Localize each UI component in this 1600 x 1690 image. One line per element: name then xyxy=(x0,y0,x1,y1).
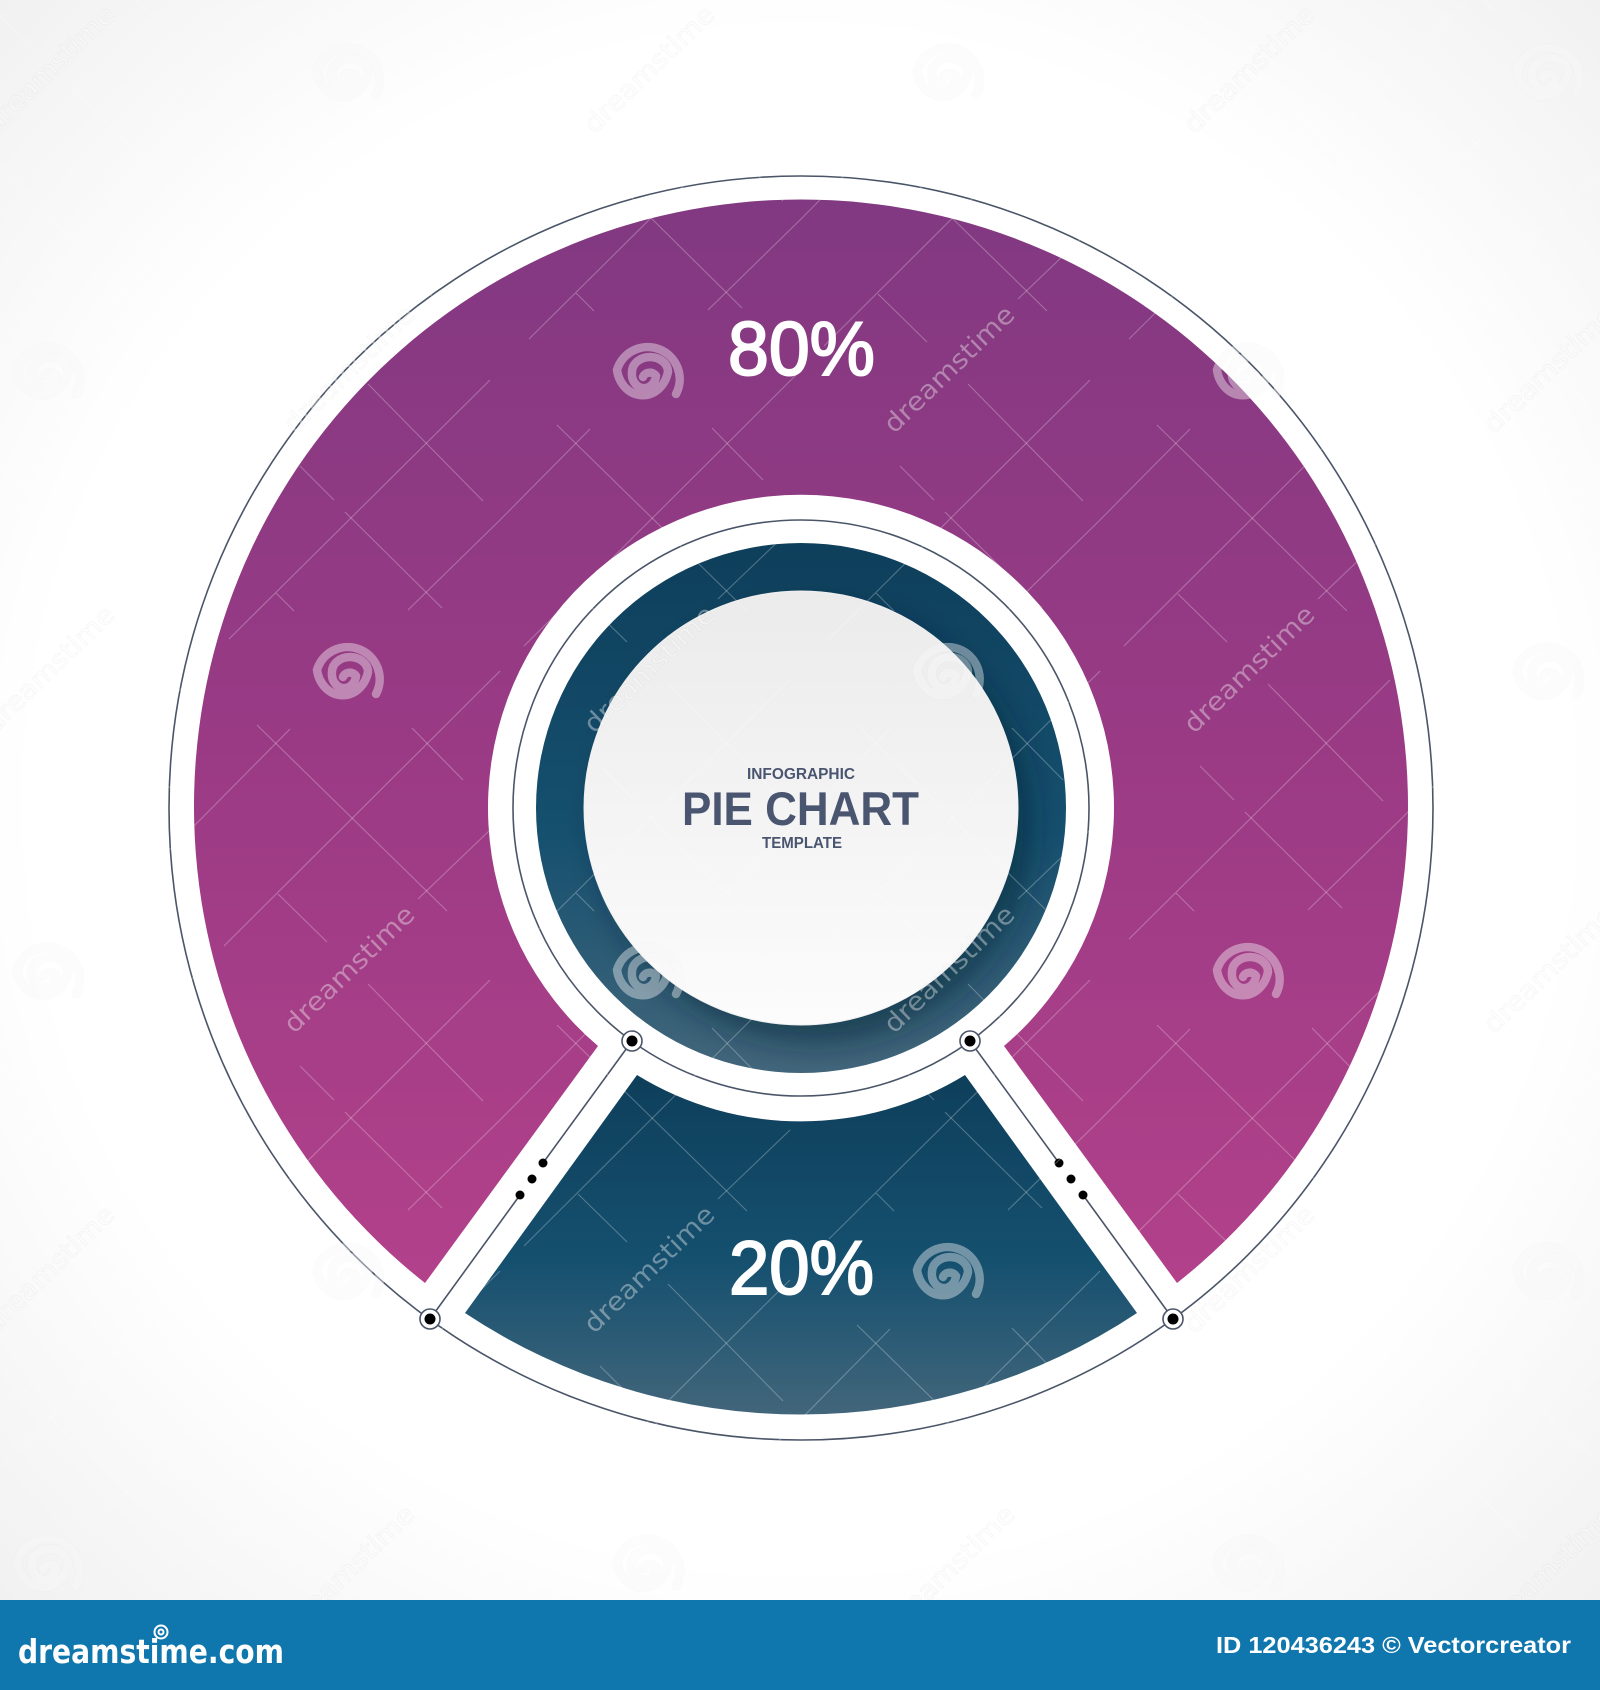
watermark overlay: dreamstime xyxy=(1178,600,1321,740)
watermark overlay: dreamstime xyxy=(878,300,1021,440)
footer logo mark xyxy=(154,1626,168,1638)
title line: template: TEMPLATE xyxy=(762,835,842,852)
watermark overlay: dreamstime xyxy=(878,1500,1021,1640)
pie chart xyxy=(169,176,1433,1440)
center title xyxy=(682,766,919,852)
title line: pie chart: PIE CHART xyxy=(682,782,919,835)
node: inner right xyxy=(960,1031,980,1051)
watermark overlay: dreamstime xyxy=(578,0,721,140)
footer logo text: dreamstime.com xyxy=(18,1632,284,1671)
watermark overlay: dreamstime xyxy=(878,900,1021,1040)
title line: infographic: INFOGRAPHIC xyxy=(747,766,855,783)
watermark overlay: dreamstime xyxy=(278,1500,421,1640)
node: inner left xyxy=(622,1031,642,1051)
watermark overlay: dreamstime xyxy=(578,600,721,740)
inner outline ring xyxy=(513,520,1089,1096)
disc shadow xyxy=(599,609,1033,1043)
node: outer left xyxy=(420,1309,440,1329)
label: 80%: 80% xyxy=(728,307,875,392)
watermark overlay: dreamstime xyxy=(1178,0,1321,140)
inner 100% teal ring xyxy=(536,543,1066,1073)
right divider line xyxy=(970,1041,1173,1319)
left divider line xyxy=(430,1041,632,1319)
label: 20%: 20% xyxy=(729,1226,874,1311)
outer outline ring xyxy=(169,176,1433,1440)
footer credit: ID 120436243 © Vectorcreator xyxy=(1216,1632,1571,1658)
watermark overlay: dreamstime xyxy=(278,900,421,1040)
watermark overlay: dreamstime xyxy=(1178,1200,1321,1340)
segment: 80% magenta xyxy=(194,199,1408,1283)
segment: 20% teal xyxy=(465,1075,1137,1414)
watermark overlay: dreamstime xyxy=(278,300,421,440)
node: outer right xyxy=(1163,1309,1183,1329)
center disc xyxy=(584,591,1018,1025)
watermark overlay: dreamstime xyxy=(578,1200,721,1340)
footer bar xyxy=(0,1600,1600,1690)
